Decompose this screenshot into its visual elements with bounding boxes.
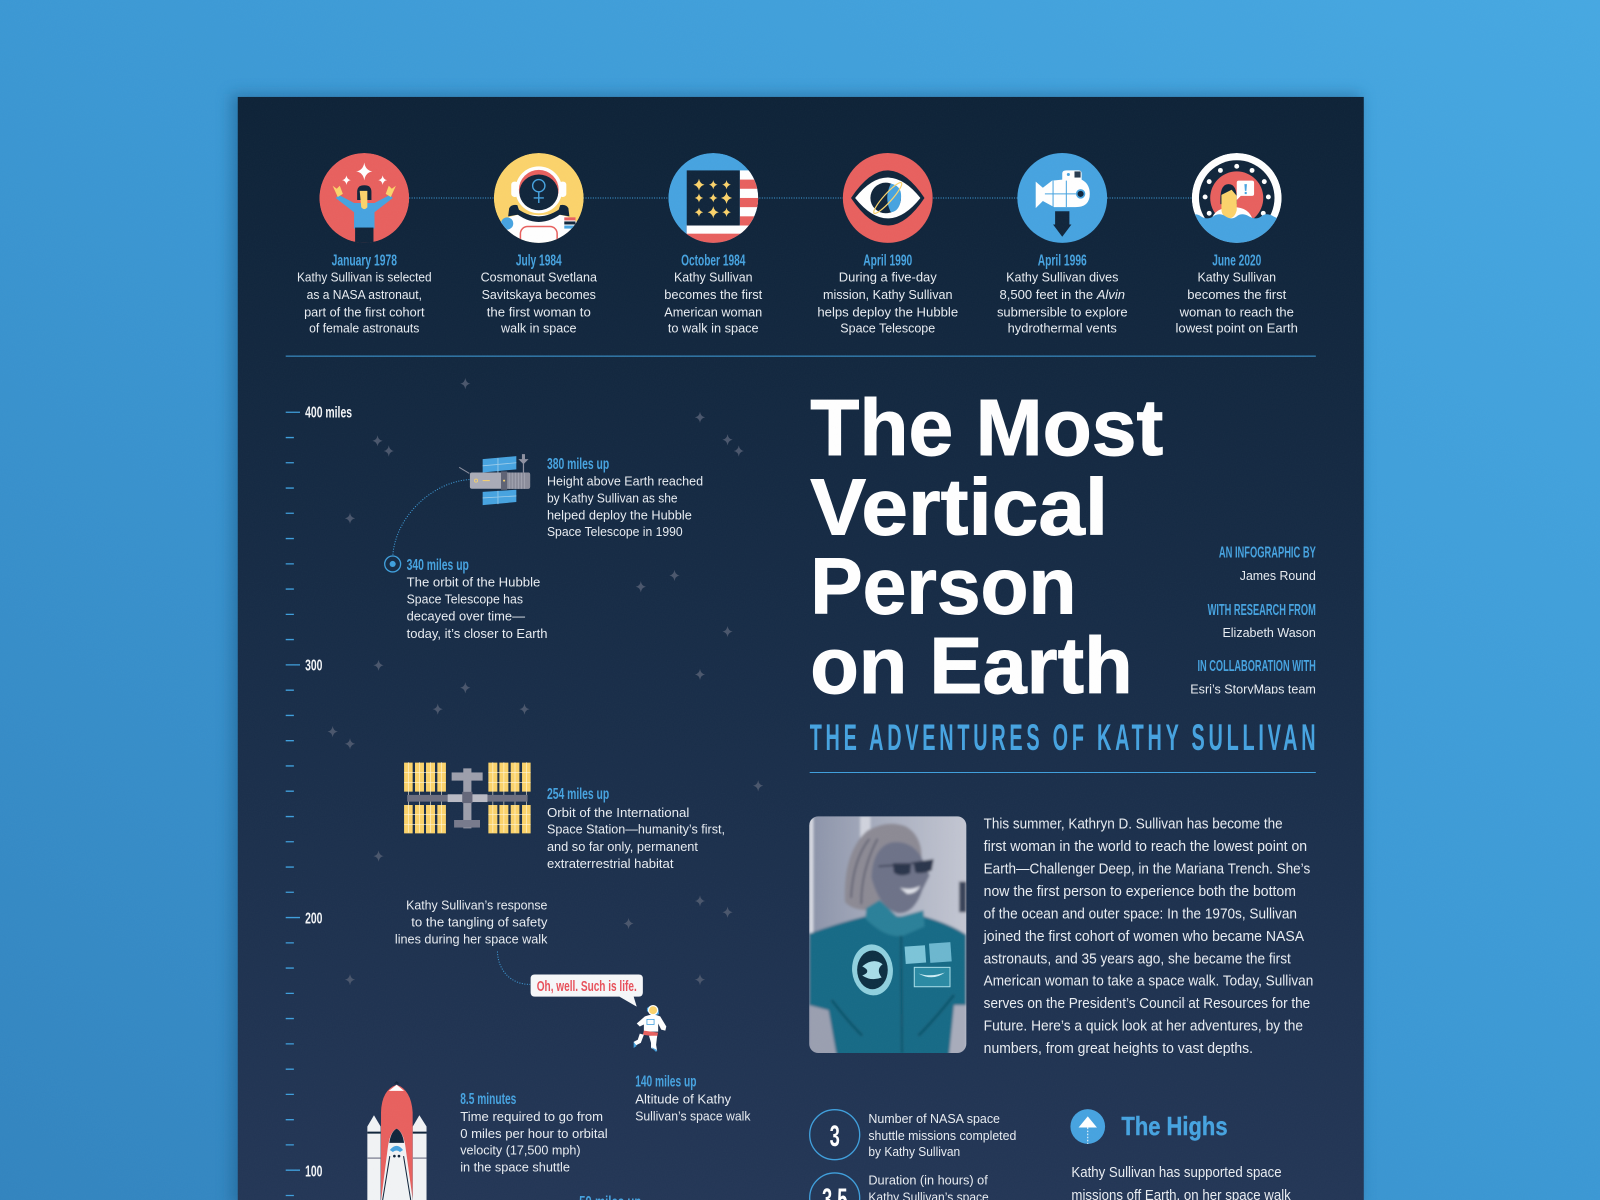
credits: Esri’s StoryMaps team xyxy=(1190,681,1316,696)
callout: 8.5 minutes: Time required to go from xyxy=(460,1109,603,1124)
description: as a NASA astronaut, xyxy=(307,287,422,302)
callout: 254 miles up: Orbit of the International xyxy=(547,805,689,820)
callout: 140 miles up: Sullivan’s space walk xyxy=(635,1108,751,1123)
intro paragraph: first woman in the world to reach the lowest point on xyxy=(984,839,1307,855)
description xyxy=(481,270,598,336)
credits: AN INFOGRAPHIC BY xyxy=(1219,545,1316,562)
description: Savitskaya becomes xyxy=(482,287,596,302)
intro paragraph: This summer, Kathryn D. Sullivan has become the xyxy=(984,817,1283,833)
description xyxy=(1176,270,1298,336)
description: the first woman to xyxy=(487,304,591,319)
timeline item: October 1984 xyxy=(664,153,768,336)
timeline item: July 1984 xyxy=(481,153,598,336)
description: becomes the first xyxy=(664,287,763,302)
callout: 8.5 minutes xyxy=(460,1091,608,1174)
description xyxy=(997,270,1128,336)
title: Person xyxy=(810,541,1077,630)
intro paragraph xyxy=(983,817,1313,1057)
credits: WITH RESEARCH FROM xyxy=(1208,602,1316,619)
description: part of the first cohort xyxy=(304,304,425,319)
callout: 380 miles up: 380 miles up xyxy=(547,456,609,473)
stat: 3.5 hours xyxy=(810,1173,989,1200)
callout: 140 miles up xyxy=(635,1074,751,1123)
description: hydrothermal vents xyxy=(1008,321,1117,336)
icon: Hubble Space Telescope xyxy=(459,454,530,505)
date: July 1984 xyxy=(516,252,562,269)
date: April 1990 xyxy=(863,252,912,269)
scale labels: 200 xyxy=(305,910,322,927)
icon: astronaut on space walk xyxy=(634,1006,666,1052)
orbit path xyxy=(393,480,469,555)
stat: 3 missions: by Kathy Sullivan xyxy=(868,1144,960,1159)
description: Kathy Sullivan xyxy=(674,270,753,285)
description xyxy=(817,270,958,336)
callout: 254 miles up: extraterrestrial habitat xyxy=(547,856,674,871)
date: June 2020 xyxy=(1212,252,1261,269)
callout: 340 miles up: The orbit of the Hubble xyxy=(407,575,540,590)
title: on Earth xyxy=(810,621,1133,710)
title: The Most xyxy=(810,383,1163,472)
callout: 340 miles up xyxy=(407,557,547,641)
altitude scale xyxy=(286,404,352,1196)
callout: 8.5 minutes: 0 miles per hour to orbital xyxy=(460,1126,608,1141)
scale labels xyxy=(305,404,352,1181)
description: American woman xyxy=(664,304,762,319)
description xyxy=(297,270,432,336)
description: woman to reach the xyxy=(1179,304,1294,319)
callout: 140 miles up: 140 miles up xyxy=(635,1074,696,1091)
description: Cosmonaut Svetlana xyxy=(481,270,598,285)
callout: 8.5 minutes: velocity (17,500 mph) xyxy=(460,1143,581,1158)
timeline item: June 2020 xyxy=(1176,153,1298,336)
speech bubble: Oh, well. Such is life. xyxy=(537,979,637,995)
callout: 140 miles up: Altitude of Kathy xyxy=(635,1092,731,1107)
description: Space Telescope xyxy=(840,321,935,336)
quote connector xyxy=(497,952,530,984)
callout: 380 miles up: by Kathy Sullivan as she xyxy=(547,491,678,506)
timeline item: April 1996 xyxy=(997,153,1128,336)
photo: Kathy Sullivan xyxy=(806,813,969,1056)
description: During a five-day xyxy=(839,270,937,285)
callout: 340 miles up: Space Telescope has xyxy=(407,592,523,607)
quote intro text: Kathy Sullivan’s response xyxy=(406,898,547,913)
intro paragraph: of the ocean and outer space: In the 1970s, Sullivan xyxy=(984,906,1297,922)
highs text xyxy=(1071,1165,1291,1200)
stat: 3 missions xyxy=(810,1110,1016,1160)
intro paragraph: serves on the President’s Council at Resources for the xyxy=(984,996,1310,1012)
icon: American flag xyxy=(668,153,758,243)
description xyxy=(664,270,763,336)
timeline connector xyxy=(409,197,1192,199)
timeline item: January 1978 xyxy=(297,153,432,336)
intro paragraph: now the first person to experience both the bottom xyxy=(984,884,1296,900)
intro paragraph: astronauts, and 35 years ago, she became the first xyxy=(984,951,1291,967)
intro paragraph: numbers, from great heights to vast depths. xyxy=(984,1041,1253,1057)
title: Vertical xyxy=(810,463,1108,552)
intro paragraph: Future. Here’s a quick look at her adventures, by the xyxy=(984,1019,1303,1035)
icon: woman under stars xyxy=(319,153,409,248)
stat: 3 missions: Number of NASA space xyxy=(868,1111,1000,1126)
description: of female astronauts xyxy=(309,321,420,336)
timeline item: April 1990 xyxy=(817,153,958,336)
description: 8,500 feet in the Alvin xyxy=(999,287,1125,302)
intro paragraph: American woman to take a space walk. Today, Sullivan xyxy=(984,974,1313,990)
credits: James Round xyxy=(1240,568,1316,583)
icon: up arrow xyxy=(1070,1109,1105,1144)
callout: 254 miles up: and so far only, permanent xyxy=(547,839,698,854)
highs text: Kathy Sullivan has supported space xyxy=(1071,1165,1282,1181)
stat: 3.5 hours: Duration (in hours) of xyxy=(868,1173,988,1188)
icon: orbit target xyxy=(385,556,401,572)
credits: IN COLLABORATION WITH xyxy=(1197,658,1316,675)
callout: 340 miles up: today, it’s closer to Earth xyxy=(407,626,547,641)
subtitle: THE ADVENTURES OF KATHY SULLIVAN xyxy=(810,718,1316,759)
icon: porthole with diver xyxy=(1192,153,1282,243)
description: to walk in space xyxy=(668,321,759,336)
intro paragraph: Earth—Challenger Deep, in the Mariana Trench. She’s xyxy=(984,861,1310,877)
callout: 340 miles up: 340 miles up xyxy=(407,557,469,574)
icon: eye with planet xyxy=(843,153,933,243)
callout: 380 miles up: Height above Earth reached xyxy=(547,474,703,489)
icon: Alvin submersible xyxy=(1017,153,1107,243)
callout: 380 miles up xyxy=(547,456,703,539)
icon: female astronaut helmet xyxy=(494,153,584,243)
description: walk in space xyxy=(500,321,577,336)
callout: 8.5 minutes: in the space shuttle xyxy=(460,1159,570,1174)
credits: Elizabeth Wason xyxy=(1222,625,1316,640)
description: Kathy Sullivan dives xyxy=(1006,270,1119,285)
scale labels: 400 miles xyxy=(305,404,352,421)
callout: 380 miles up: Space Telescope in 1990 xyxy=(547,524,683,539)
stat: 3 missions: 3 xyxy=(830,1120,840,1153)
speech bubble xyxy=(531,974,643,1007)
quote intro text: to the tangling of safety xyxy=(411,915,548,930)
description: helps deploy the Hubble xyxy=(817,304,958,319)
title xyxy=(810,383,1163,710)
quote intro text xyxy=(395,898,548,946)
callout: 254 miles up xyxy=(547,786,725,871)
description: Kathy Sullivan xyxy=(1197,270,1276,285)
callout: 8.5 minutes: 8.5 minutes xyxy=(460,1091,516,1108)
poster panel xyxy=(238,97,1364,1200)
scale labels: 100 xyxy=(305,1164,322,1181)
callout: 254 miles up: Space Station—humanity’s first, xyxy=(547,822,725,837)
heading: The Highs: The Highs xyxy=(1121,1113,1228,1141)
stat: 3 missions: shuttle missions completed xyxy=(868,1128,1016,1143)
callout: 254 miles up: 254 miles up xyxy=(547,786,609,803)
icon: space shuttle xyxy=(367,1081,427,1200)
description: Kathy Sullivan is selected xyxy=(297,270,432,285)
date: October 1984 xyxy=(681,252,746,269)
description: becomes the first xyxy=(1187,287,1287,302)
scale labels: 300 xyxy=(305,657,322,674)
date: January 1978 xyxy=(332,252,397,269)
callout: 380 miles up: helped deploy the Hubble xyxy=(547,507,692,522)
description: mission, Kathy Sullivan xyxy=(823,287,953,302)
description: submersible to explore xyxy=(997,304,1128,319)
callout: 340 miles up: decayed over time— xyxy=(407,608,526,623)
icon: International Space Station xyxy=(404,762,531,833)
quote intro text: lines during her space walk xyxy=(395,931,548,946)
intro paragraph: joined the first cohort of women who became NASA xyxy=(983,929,1304,945)
credits xyxy=(1190,545,1316,696)
description: lowest point on Earth xyxy=(1176,321,1298,336)
date: April 1996 xyxy=(1038,252,1087,269)
